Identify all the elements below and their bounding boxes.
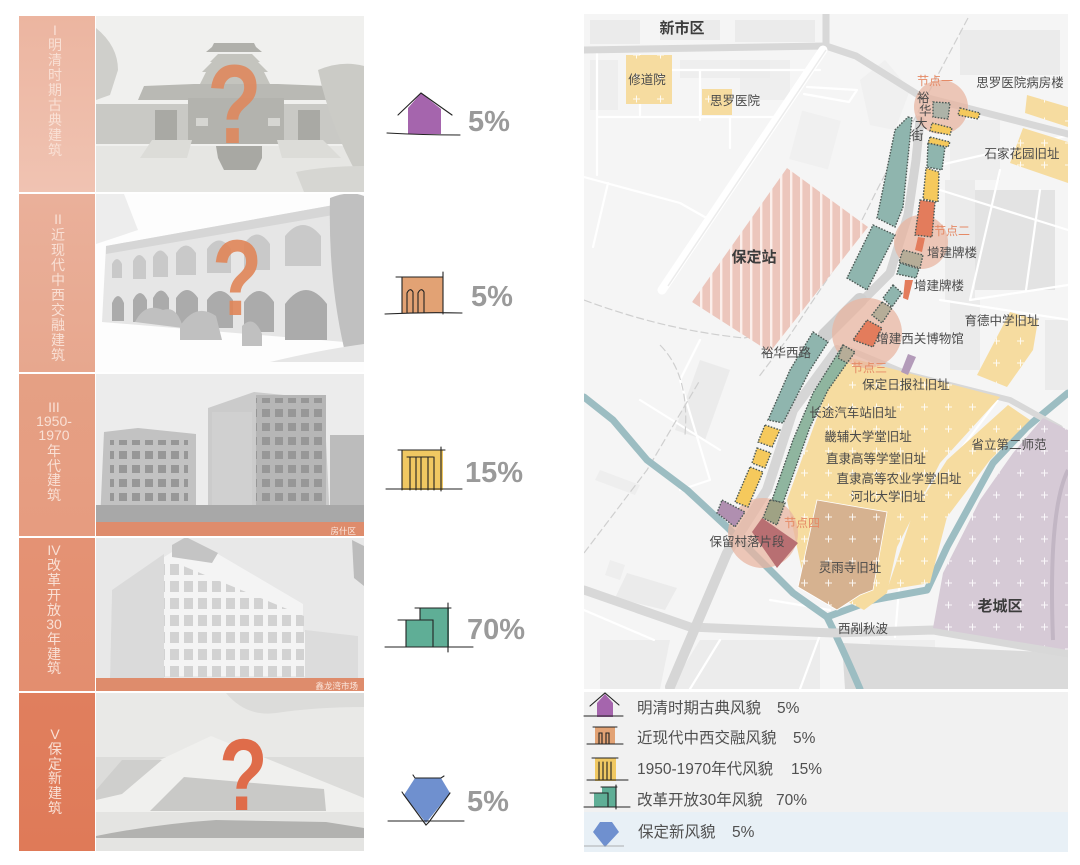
photo: classical temple xyxy=(96,16,364,192)
era label strip IV: 革 xyxy=(47,572,61,588)
photo: residential blocks xyxy=(96,374,364,536)
era label strip IV: IV xyxy=(47,542,61,558)
era label strip II: II xyxy=(54,211,62,227)
street blocks: tan xyxy=(763,102,950,525)
question mark I: ? xyxy=(207,43,262,167)
row IV: reform era xyxy=(19,537,364,691)
map labels: 增建牌楼 xyxy=(927,245,977,260)
era label strip II: 西 xyxy=(51,287,65,303)
map labels: 老城区 xyxy=(977,597,1023,615)
legend item: 1950-1970 xyxy=(587,758,822,781)
legend item: classical: 5% xyxy=(777,700,800,717)
era label strip II: 筑 xyxy=(51,347,65,363)
era label strip III: 年 xyxy=(47,443,61,459)
legend item: sino-western: 5% xyxy=(793,730,816,747)
era label strip IV xyxy=(19,538,95,691)
era label strip I: 筑 xyxy=(48,142,62,158)
map labels xyxy=(628,19,1064,636)
era label strip V: 筑 xyxy=(48,800,62,816)
panel: style sketches and shares xyxy=(385,93,525,825)
icon: blue pentagon 5%: 5% xyxy=(467,786,509,818)
era label strip V: 定 xyxy=(48,756,62,772)
era label strip III: 1970 xyxy=(38,427,70,443)
canal xyxy=(584,393,1068,689)
era label strip IV: 改 xyxy=(47,557,61,573)
era label strip V: 建 xyxy=(48,785,62,801)
era label strip IV: 年 xyxy=(47,631,61,647)
photo: railway station xyxy=(96,693,364,851)
map labels: 直隶高等学堂旧址 xyxy=(826,451,926,466)
era label strip III: 建 xyxy=(47,472,61,488)
zones: heritage yellow xyxy=(626,55,1068,610)
legend item: reform era: 70% xyxy=(776,792,807,809)
era label strip III: 筑 xyxy=(47,487,61,503)
map labels: 畿辅大学堂旧址 xyxy=(824,429,912,444)
row III: 1950-1970 xyxy=(19,374,364,536)
caption band III: 房什区 xyxy=(330,526,356,536)
era label strip IV: 开 xyxy=(47,587,61,603)
panel: architecture era column xyxy=(19,16,364,851)
map labels: 直隶高等农业学堂旧址 xyxy=(836,471,962,486)
railway dashes xyxy=(584,18,968,553)
street blocks: teal xyxy=(768,117,945,423)
era label strip III: III xyxy=(48,399,60,415)
era label strip IV: 30 xyxy=(46,616,62,632)
node circles xyxy=(728,80,968,568)
legend item: new style: 5% xyxy=(732,824,755,841)
era label strip III: 1950- xyxy=(36,413,72,429)
caption band IV: 鑫龙湾市场 xyxy=(315,681,358,691)
zone: station hatch xyxy=(692,168,868,352)
icon: orange arches 5% xyxy=(385,272,513,314)
map labels: 河北大学旧址 xyxy=(850,489,926,504)
map labels: 石家花园旧址 xyxy=(984,146,1060,161)
era label strip I: 期 xyxy=(48,82,62,98)
era label strip I: 古 xyxy=(48,97,62,113)
question mark II: ? xyxy=(212,218,262,339)
map labels: 保留村落片段 xyxy=(709,534,785,549)
icon: yellow columns 15%: 15% xyxy=(465,457,523,489)
photo: office tower xyxy=(96,537,364,691)
legend item: reform era: 改革开放30年风貌 xyxy=(637,791,763,809)
map labels: 节点四 xyxy=(784,516,820,530)
map labels: 长途汽车站旧址 xyxy=(809,405,897,420)
legend item: 1950-1970: 15% xyxy=(791,761,822,778)
question mark V: ? xyxy=(219,719,268,832)
caption band IV xyxy=(96,678,364,691)
icon: orange arches 5%: 5% xyxy=(471,281,513,313)
caption band III xyxy=(96,522,364,536)
map labels: 增建牌楼 xyxy=(914,278,964,293)
map labels: 裕华大街 xyxy=(911,90,932,143)
map labels: 裕华西路 xyxy=(761,345,811,360)
era label strip II: 现 xyxy=(51,242,65,258)
minor roads xyxy=(584,50,1070,689)
street blocks: purple and mauve xyxy=(717,354,916,568)
era label strip III xyxy=(19,374,95,536)
era label strip I xyxy=(19,16,95,192)
map labels: 灵雨寺旧址 xyxy=(819,561,882,575)
map labels: 省立第二师范 xyxy=(971,437,1047,452)
map labels: 保定站 xyxy=(731,248,777,266)
street block: green xyxy=(772,345,855,503)
era label strip II: 建 xyxy=(51,332,65,348)
street blocks: yellow xyxy=(735,108,980,507)
rail corridor xyxy=(662,50,823,290)
era label strip II: 代 xyxy=(51,257,65,273)
era label strip V xyxy=(19,693,95,851)
era label strip I: I xyxy=(53,22,57,38)
map labels: 增建西关博物馆 xyxy=(876,331,964,346)
city blocks xyxy=(590,20,1068,689)
legend item: classical: 明清时期古典风貌 xyxy=(637,699,761,717)
map labels: 思罗医院 xyxy=(710,94,760,108)
map labels: 节点三 xyxy=(851,361,887,375)
era label strip IV: 建 xyxy=(47,646,61,662)
icon: teal blocks 70% xyxy=(385,603,525,652)
row V: new Baoding xyxy=(19,693,364,851)
era label strip V: 保 xyxy=(48,741,62,757)
era label strip I: 典 xyxy=(48,112,62,128)
map labels: 节点一 xyxy=(917,74,953,88)
legend item: sino-western xyxy=(587,727,816,747)
photo: arcaded building xyxy=(96,193,364,372)
legend item: sino-western: 近现代中西交融风貌 xyxy=(637,729,777,747)
legend item: new style: 保定新风貌 xyxy=(638,823,716,841)
main roads xyxy=(584,14,1068,687)
map labels: 新市区 xyxy=(659,19,705,37)
map labels: 保定日报社旧址 xyxy=(862,377,950,392)
map labels: 思罗医院病房楼 xyxy=(976,75,1064,90)
legend item: classical xyxy=(584,693,800,717)
zone: Lingyu temple xyxy=(798,500,887,610)
era label strip V: 新 xyxy=(48,770,62,786)
era label strip I: 明 xyxy=(48,37,62,53)
panel: legend xyxy=(584,692,1068,852)
era label strip I: 清 xyxy=(48,52,62,68)
map labels: 节点二 xyxy=(934,224,970,238)
era label strip II: 交 xyxy=(51,302,65,318)
icon: purple house 5% xyxy=(387,93,510,138)
era label strip II: 近 xyxy=(51,227,65,243)
era label strip V: V xyxy=(50,726,60,742)
era label strip IV: 放 xyxy=(47,602,61,618)
era label strip I: 建 xyxy=(48,127,62,143)
legend item: 1950-1970: 1950-1970年代风貌 xyxy=(637,760,773,778)
street blocks: orange xyxy=(853,200,935,347)
era label strip II xyxy=(19,194,95,372)
era label strip II: 中 xyxy=(51,272,65,288)
row I: Ming-Qing classical xyxy=(19,16,364,192)
icon: yellow columns 15% xyxy=(386,447,523,491)
era label strip III: 代 xyxy=(47,458,61,474)
era label strip IV: 筑 xyxy=(47,660,61,676)
map labels: 育德中学旧址 xyxy=(964,313,1040,328)
legend item: reform era xyxy=(584,785,807,809)
era label strip II: 融 xyxy=(51,317,65,333)
map labels: 修道院 xyxy=(628,72,666,87)
map labels: 西剐秋波 xyxy=(838,621,888,636)
row II: modern sino-western xyxy=(19,193,364,372)
icon: blue pentagon 5% xyxy=(388,775,509,825)
icon: purple house 5%: 5% xyxy=(468,106,510,138)
zone: old city xyxy=(933,418,1068,650)
era label strip I: 时 xyxy=(48,67,62,83)
legend item: new style xyxy=(584,822,755,847)
icon: teal blocks 70%: 70% xyxy=(467,614,525,646)
map: Baoding site plan xyxy=(584,14,1070,689)
